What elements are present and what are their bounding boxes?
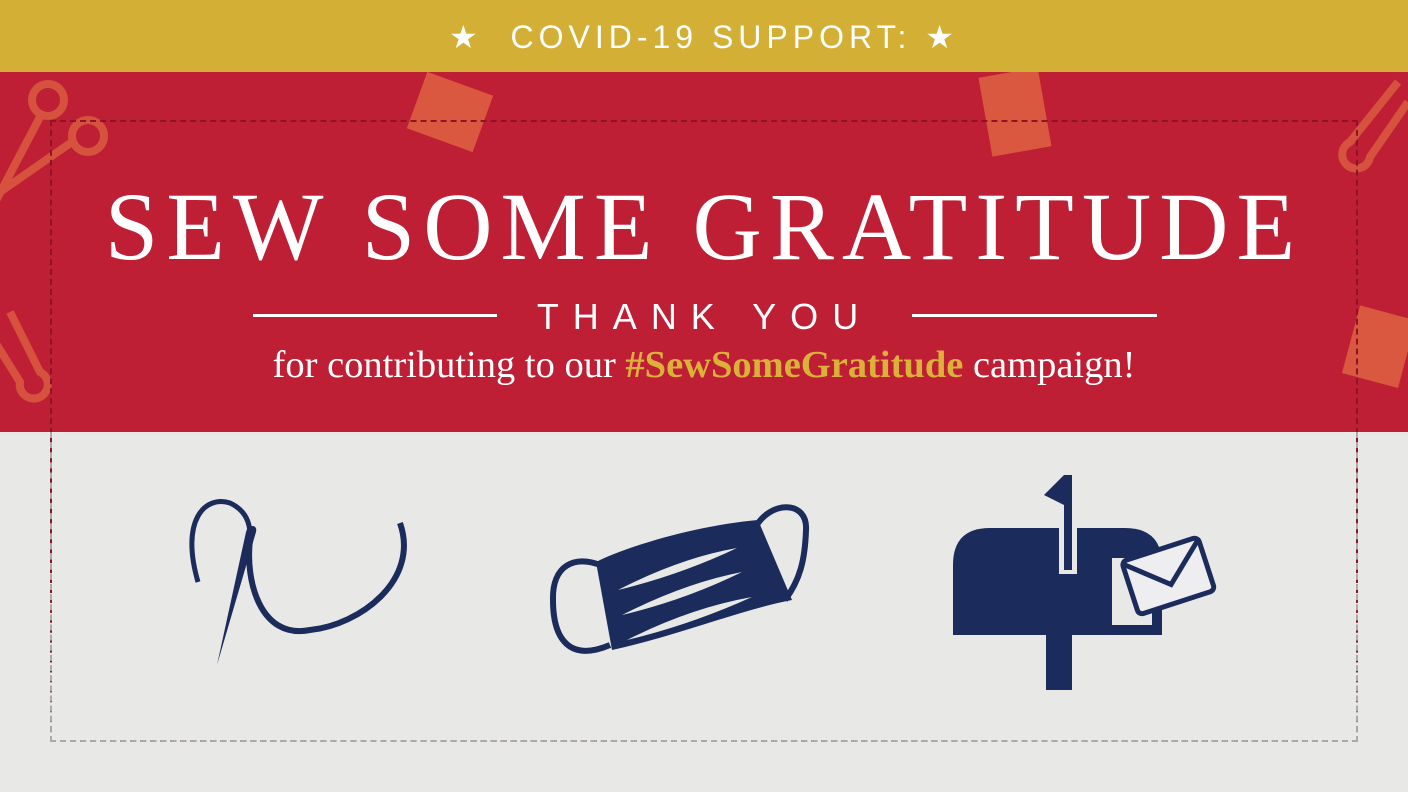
thank you subheading	[253, 296, 1157, 337]
icon: mailbox with letter	[953, 475, 1216, 690]
top banner	[0, 0, 1408, 72]
title: SEW SOME GRATITUDE	[105, 173, 1303, 280]
red header panel	[0, 72, 1408, 432]
icon: face mask	[550, 504, 810, 654]
dashed stitch border	[50, 120, 1358, 742]
top banner: ★ COVID-19 SUPPORT: ★	[449, 19, 959, 55]
icon: needle and thread	[189, 499, 407, 665]
thank you subheading: THANK YOU	[537, 296, 872, 337]
tagline: for contributing to our #SewSomeGratitude campaign!	[273, 344, 1135, 386]
